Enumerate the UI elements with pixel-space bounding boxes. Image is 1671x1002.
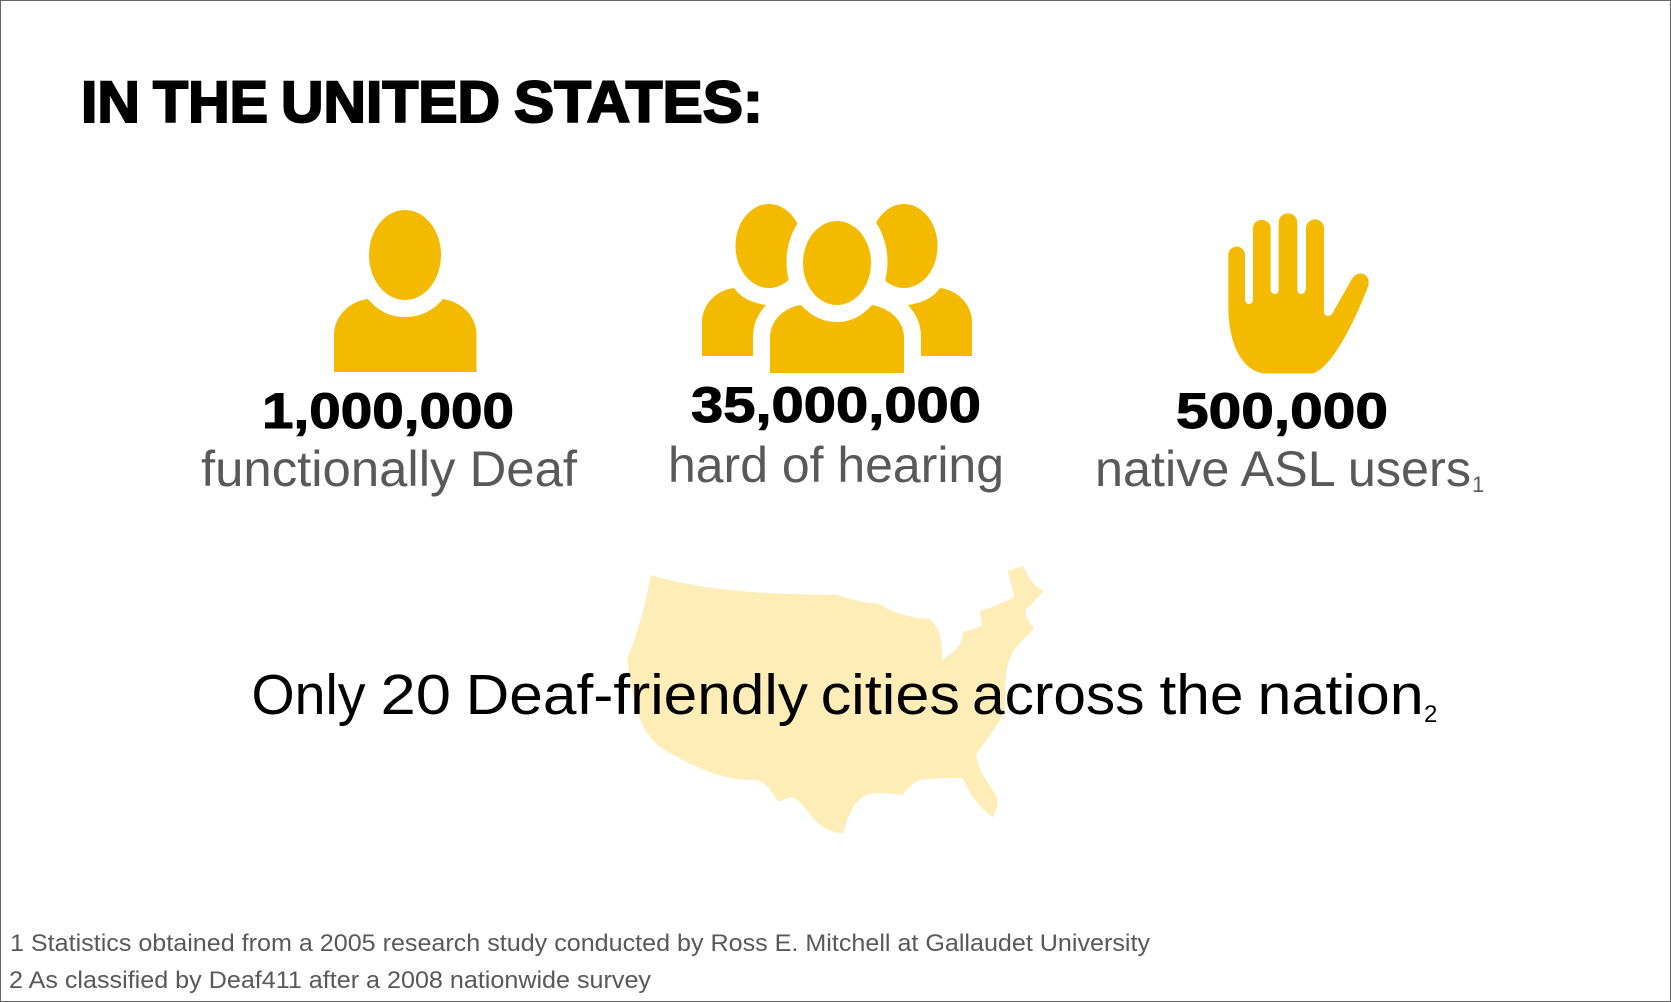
icon: single person: [334, 210, 476, 372]
footnotes: 2 As classified by Deaf411 after a 2008 nationwide survey: [9, 967, 651, 994]
title: [81, 70, 763, 135]
stat: 1,000,000 functionally Deaf: 1,000,000: [262, 383, 514, 439]
title: IN: [81, 70, 140, 135]
icon: group of people: [702, 200, 972, 373]
statement: Deaf-friendly cities: [252, 663, 1437, 728]
title: STATES:: [514, 70, 763, 135]
stat: 500,000 native ASL users: [1095, 383, 1484, 497]
stat: 500,000 native ASL users: 1: [1472, 472, 1484, 497]
footnotes: [9, 930, 1150, 994]
icon: raised hand: [1228, 213, 1369, 373]
statement: Deaf-friendly cities: 20: [380, 663, 451, 727]
stat: 35,000,000 hard of hearing: 35,000,000: [691, 377, 981, 433]
title: THE: [153, 70, 268, 135]
statement: Deaf-friendly cities: nation: [1258, 663, 1424, 727]
stat: 35,000,000 hard of hearing: hard of hearing: [668, 437, 1004, 493]
map: United States silhouette: [627, 566, 1044, 833]
stat: 1,000,000 functionally Deaf: functionally Deaf: [201, 441, 577, 497]
statement: Deaf-friendly cities: across: [972, 663, 1144, 727]
statement: Deaf-friendly cities: the: [1160, 663, 1244, 727]
statement: Deaf-friendly cities: 2: [1424, 701, 1437, 728]
stat: 500,000 native ASL users: native ASL users: [1095, 441, 1471, 497]
stat: 1,000,000 functionally Deaf: [201, 383, 577, 497]
statement: Deaf-friendly cities: cities: [821, 663, 960, 727]
statement: Deaf-friendly cities: Only: [252, 663, 366, 727]
title: UNITED: [281, 70, 500, 135]
stat: 35,000,000 hard of hearing: [668, 377, 1004, 493]
footnotes: 1 Statistics obtained from a 2005 research study conducted by Ross E. Mitchell at Gallaudet University: [10, 930, 1150, 957]
statement: Deaf-friendly cities: Deaf-friendly: [466, 663, 809, 727]
stat: 500,000 native ASL users: 500,000: [1176, 383, 1388, 439]
